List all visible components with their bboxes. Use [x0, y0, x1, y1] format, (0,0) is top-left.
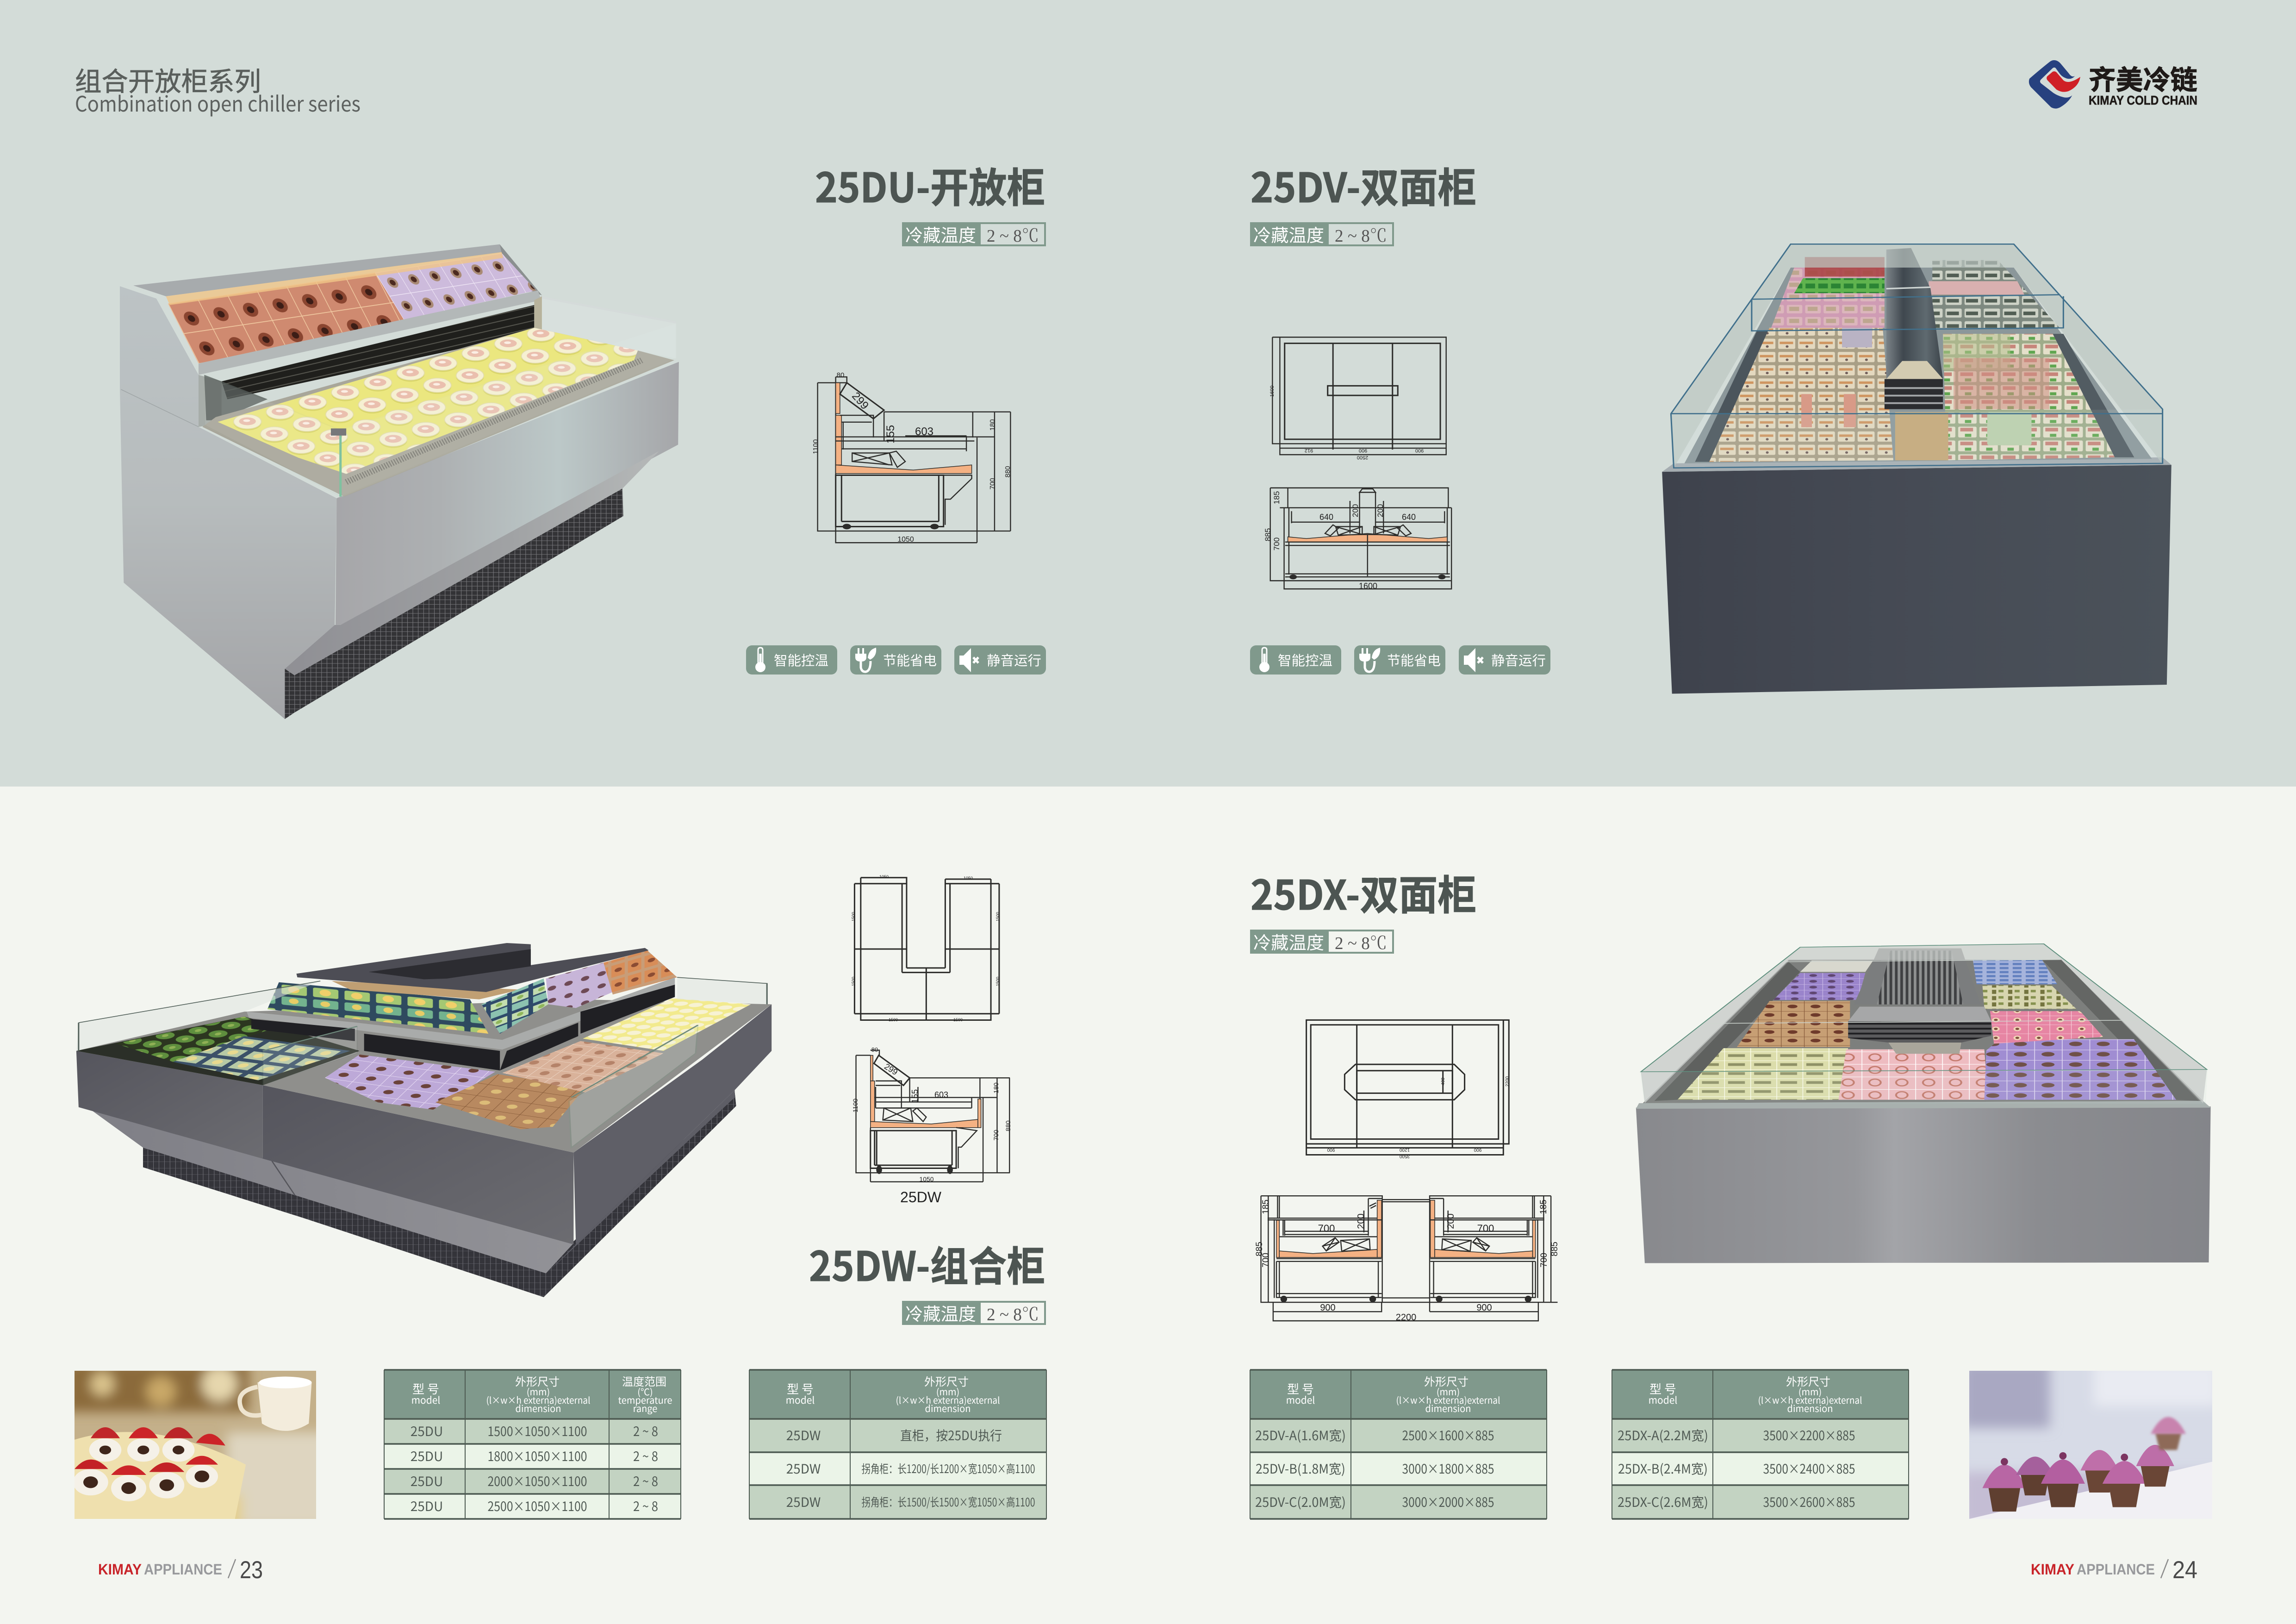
table: 25DW specifications: 拐角柜：长1500/长1500×宽1050×高1100 — [862, 1493, 1035, 1510]
table: 25DU specifications: 1500×1050×1100 — [488, 1422, 587, 1440]
table header: model — [1649, 1393, 1677, 1407]
technical drawing: 25DW plan and section: 1500 — [851, 912, 856, 921]
badge: energy saving: 节能省电 — [1387, 650, 1441, 669]
upper shelf: green boxes — [268, 982, 488, 1034]
glass top and panes — [1641, 947, 1800, 1103]
table: 25DX specifications: 3500×2400×885 — [1763, 1459, 1855, 1478]
food bed base — [202, 328, 674, 497]
heading: 25DW combination cabinet: 25DW-组合柜 — [809, 1234, 1045, 1293]
technical drawing: 25DW plan and section: 603 — [934, 1090, 948, 1099]
grille backing — [143, 1093, 736, 1297]
upper shelf: right run — [481, 979, 548, 1034]
steel rim — [1636, 1101, 2211, 1109]
product photo: 25DX double-sided cabinet — [1636, 944, 2211, 1263]
steel base — [1636, 1106, 2211, 1263]
technical drawing: 25DW plan and section: 700 — [992, 1130, 1000, 1141]
technical drawing: 25DW plan and section — [851, 874, 1012, 1206]
technical drawing: 25DU side section: 1100 — [812, 439, 820, 454]
technical drawing: 25DX plan and section: 900 — [1476, 1303, 1492, 1313]
technical drawing: 25DV plan and section: 900 — [1415, 448, 1424, 453]
footer: page 24: 24 — [2172, 1556, 2197, 1584]
technical drawing: 25DX plan and section: 885 — [1255, 1242, 1264, 1256]
table header: 温度范围 — [622, 1373, 666, 1389]
table: 25DX specifications: 25DX-C(2.6M宽) — [1618, 1493, 1708, 1511]
technical drawing: 25DX plan and section: 185 — [1261, 1199, 1271, 1214]
table header: (mm) — [527, 1385, 550, 1398]
table header: 外形尺寸 — [1424, 1373, 1468, 1389]
model label: 25DW — [900, 1189, 942, 1206]
display bed — [1684, 268, 2152, 463]
photo: cream cake with strawberries — [66, 1362, 329, 1529]
technical drawing: 25DV plan and section: 640 — [1319, 512, 1333, 522]
technical drawing: 25DX plan and section: 1200 — [1399, 1147, 1410, 1152]
table: 25DU specifications: 25DU — [411, 1422, 443, 1440]
technical drawing: 25DW plan and section: 180 — [992, 1082, 1000, 1093]
footer: page 23: APPLIANCE — [144, 1561, 222, 1578]
front panels — [76, 1051, 263, 1159]
food blocks: right column — [1985, 1039, 2176, 1100]
technical drawing: 25DX plan and section: 2200 — [1396, 1312, 1416, 1323]
heading: 25DU open cabinet: 25DU-开放柜 — [815, 156, 1045, 214]
footer: page 24 — [2031, 1556, 2197, 1584]
center tower — [1886, 248, 1943, 379]
lit shelf: orange boxes — [168, 273, 404, 363]
badge: silent operation — [954, 645, 1046, 675]
technical drawing: 25DW plan and section: 1500 — [996, 912, 1000, 921]
technical drawing: 25DW plan and section: 80 — [871, 1046, 878, 1053]
lower bed: yellow cups — [583, 998, 751, 1051]
dark base — [1662, 465, 2172, 694]
glass enclosure — [1671, 244, 1791, 468]
table: 25DU specifications: 1800×1050×1100 — [488, 1447, 587, 1465]
display bed base — [76, 999, 772, 1153]
photo: pink cupcakes — [1962, 1362, 2220, 1526]
table: 25DX specifications: 25DX-A(2.2M宽) — [1618, 1426, 1708, 1444]
glass clip — [331, 428, 346, 436]
icon: logo mark — [2029, 60, 2080, 108]
table header: model — [786, 1393, 815, 1407]
technical drawing: 25DU side section: 80 — [837, 371, 844, 379]
table: 25DV specifications: 3000×2000×885 — [1402, 1493, 1494, 1511]
U-shaped canopy — [296, 943, 649, 992]
lower slant panel — [285, 451, 659, 675]
temperature badge: 25DU — [902, 221, 1045, 247]
table header: 外形尺寸 — [515, 1373, 560, 1389]
table header: 型 号 — [787, 1380, 814, 1397]
technical drawing: 25DX plan and section: 700 — [1318, 1223, 1335, 1234]
technical drawing: 25DU side section: 603 — [915, 425, 933, 438]
technical drawing: 25DX plan and section: 200 — [1446, 1213, 1456, 1229]
technical drawing: 25DX plan and section: 900 — [1320, 1303, 1336, 1313]
technical drawing: 25DX plan and section: 900 — [1327, 1147, 1335, 1152]
technical drawing: 25DV plan and section: 900 — [1359, 448, 1367, 453]
technical drawing: 25DW plan and section: 1050 — [879, 874, 889, 879]
glass panes — [569, 1025, 698, 1148]
product photo: 25DW combination cabinet — [76, 943, 772, 1297]
table header — [411, 1373, 672, 1415]
cake and rolls — [66, 1432, 246, 1524]
black air curtains — [364, 1034, 500, 1070]
temperature badge: 25DV: 冷藏温度 — [1253, 221, 1324, 247]
table: 25DU specifications: 25DU — [411, 1447, 443, 1465]
temperature badge: 25DW: 2 ~ 8℃ — [987, 1305, 1039, 1324]
table header: 型 号 — [1287, 1380, 1314, 1397]
technical drawing: 25DX plan and section: 3500 — [1399, 1154, 1410, 1159]
technical drawing: 25DX plan and section: 700 — [1539, 1253, 1549, 1268]
technical drawing: 25DX plan and section: 885 — [1550, 1242, 1560, 1256]
temperature badge: 25DX: 冷藏温度 — [1253, 929, 1324, 954]
footer: page 24: KIMAY — [2031, 1561, 2074, 1578]
table: 25DU specifications: 2 ~ 8 — [633, 1447, 658, 1465]
temperature badge: 25DW: 冷藏温度 — [905, 1300, 976, 1325]
footer: page 24: APPLIANCE — [2077, 1561, 2155, 1578]
tower louvres — [1885, 379, 1943, 409]
badge: silent operation: 静音运行 — [987, 650, 1041, 669]
product photo: 25DU open chiller — [120, 244, 679, 719]
table header: range — [633, 1401, 657, 1415]
lower bed: green produce — [115, 1017, 272, 1062]
table: 25DV specifications: 25DV-A(1.6M宽) — [1255, 1426, 1346, 1444]
table header: dimension — [925, 1401, 971, 1415]
center tower — [1854, 948, 1980, 1005]
food blocks: center pink — [1839, 1049, 1988, 1100]
technical drawing: 25DU side section — [812, 371, 1012, 543]
food: front left — [1709, 328, 1893, 462]
table: 25DW specifications: 拐角柜：长1200/长1200×宽1050×高1100 — [862, 1460, 1035, 1477]
technical drawing: 25DU side section: 155 — [884, 425, 897, 443]
table header: model — [1286, 1393, 1315, 1407]
technical drawing: 25DV plan and section: 912 — [1305, 448, 1313, 453]
temperature badge: 25DV — [1250, 221, 1393, 247]
lower bed: tan boxes — [502, 1041, 663, 1093]
technical drawing: 25DX plan and section: 200 — [1356, 1213, 1366, 1229]
footer: page 23 — [98, 1556, 263, 1584]
lower bed: purple boxes — [325, 1055, 495, 1110]
table header: 外形尺寸 — [1786, 1373, 1830, 1389]
temperature badge: 25DW — [902, 1300, 1045, 1325]
cabinet left side — [120, 286, 336, 719]
table header: (mm) — [1437, 1385, 1460, 1398]
table header: temperature — [618, 1393, 672, 1406]
temperature badge: 25DV: 2 ~ 8℃ — [1335, 226, 1387, 246]
logo: Kimay Cold Chain: KIMAY COLD CHAIN — [2089, 93, 2197, 107]
table: 25DX specifications: 3500×2600×885 — [1763, 1493, 1855, 1511]
table: 25DV specifications: 3000×1800×885 — [1402, 1459, 1494, 1478]
technical drawing: 25DV plan and section — [1263, 337, 1451, 591]
badge: silent operation: 静音运行 — [1491, 650, 1546, 669]
page heading: Combination open chiller series — [75, 87, 361, 118]
badge: smart temperature control — [1250, 645, 1341, 675]
table header: dimension — [516, 1401, 561, 1415]
technical drawing: 25DU side section: 1050 — [897, 536, 914, 543]
table: 25DV specifications: 25DV-C(2.0M宽) — [1255, 1493, 1346, 1511]
footer: page 23: KIMAY — [98, 1561, 142, 1578]
technical drawing: 25DW plan and section: 880 — [1004, 1120, 1012, 1131]
table header — [1286, 1373, 1500, 1415]
logo: Kimay Cold Chain — [2029, 58, 2197, 108]
technical drawing: 25DX plan and section: 185 — [1539, 1199, 1549, 1214]
lit shelf: purple boxes — [375, 253, 536, 319]
display bed — [1643, 960, 2203, 1103]
technical drawing: 25DV plan and section: 185 — [1272, 491, 1281, 504]
table header: (mm) — [1798, 1385, 1822, 1398]
technical drawing: 25DX plan and section: 700 — [1261, 1253, 1271, 1268]
lower bed: brown boxes — [436, 1074, 585, 1129]
technical drawing: 25DV plan and section: 200 — [1351, 504, 1360, 517]
product photo: 25DV double-sided cabinet — [1662, 244, 2172, 694]
temperature badge: 25DX — [1250, 929, 1393, 954]
heading: 25DV double-sided cabinet: 25DV-双面柜 — [1251, 156, 1476, 214]
badge: energy saving: 节能省电 — [883, 650, 937, 669]
table: 25DU specifications: 25DU — [411, 1472, 443, 1490]
table header: dimension — [1425, 1401, 1471, 1415]
table: 25DU specifications: 25DU — [411, 1497, 443, 1515]
technical drawing: 25DV plan and section: 2500 — [1357, 455, 1368, 460]
page heading — [75, 61, 361, 118]
badge: energy saving — [1354, 645, 1445, 675]
table: 25DX specifications: 3500×2200×885 — [1763, 1426, 1855, 1444]
table: 25DX specifications: 25DX-B(2.4M宽) — [1618, 1459, 1708, 1478]
temperature badge: 25DU: 2 ~ 8℃ — [987, 226, 1039, 246]
badge: silent operation — [1459, 645, 1550, 675]
technical drawing: 25DU side section: 880 — [1004, 466, 1012, 478]
temperature badge: 25DX: 2 ~ 8℃ — [1335, 934, 1387, 953]
background: upper panel — [0, 0, 2296, 787]
technical drawing: 25DV plan and section: 1600 — [1359, 581, 1377, 591]
table: 25DW specifications — [749, 1370, 1046, 1519]
food bed: yellow cups — [218, 328, 638, 474]
slanted lower panels — [93, 1111, 573, 1274]
technical drawing: 25DV plan and section: 700 — [1272, 537, 1281, 550]
table: 25DW specifications: 25DW — [786, 1459, 821, 1478]
table header: model — [411, 1393, 440, 1407]
heading: 25DX double-sided cabinet: 25DX-双面柜 — [1251, 863, 1476, 922]
ventilation grille — [285, 488, 623, 719]
table header: (l×w×h externa)external — [1396, 1393, 1500, 1406]
feature badges: 25DU — [746, 645, 1046, 675]
technical drawing: 25DW plan and section: 1050 — [919, 1175, 934, 1183]
technical drawing: 25DX plan and section — [1255, 1020, 1560, 1323]
food blocks: left column — [1677, 1048, 1848, 1100]
technical drawing: 25DU side section: 299 — [849, 390, 871, 412]
table header: 型 号 — [1649, 1380, 1676, 1397]
food: front right — [1943, 334, 2115, 460]
table: 25DU specifications — [384, 1370, 681, 1519]
table header: 外形尺寸 — [924, 1373, 969, 1389]
table: 25DV specifications: 25DV-B(1.8M宽) — [1256, 1459, 1345, 1478]
technical drawing: 25DX plan and section: 400 — [1441, 1077, 1446, 1085]
table header: (l×w×h externa)external — [1758, 1393, 1862, 1406]
table header — [786, 1373, 1000, 1415]
table header: dimension — [1787, 1401, 1833, 1415]
table: 25DU specifications: 2 ~ 8 — [633, 1422, 658, 1440]
technical drawing: 25DU side section: 700 — [989, 478, 996, 490]
table: 25DU specifications: 2 ~ 8 — [633, 1472, 658, 1490]
technical drawing: 25DU side section: 180 — [989, 419, 996, 431]
white plate — [1969, 1462, 2212, 1519]
temperature badge: 25DU: 冷藏温度 — [905, 221, 976, 247]
technical drawing: 25DW plan and section: 155 — [910, 1089, 920, 1103]
footer: page 23: 23 — [240, 1556, 263, 1584]
table header: (l×w×h externa)external — [486, 1393, 591, 1406]
badge: smart temperature control: 智能控温 — [774, 650, 828, 669]
technical drawing: 25DW plan and section: 1100 — [852, 1099, 859, 1112]
food: back right — [1932, 260, 2060, 328]
table header: (℃) — [637, 1385, 653, 1398]
technical drawing: 25DV plan and section: 1600 — [1269, 386, 1275, 397]
technical drawing: 25DW plan and section: 1500 — [889, 1018, 898, 1022]
table: 25DW specifications: 直柜，按25DU执行 — [900, 1426, 1002, 1444]
brown cake block — [1895, 412, 1948, 460]
technical drawing: 25DX plan and section: 900 — [1474, 1147, 1481, 1152]
feature badges: 25DV — [1250, 645, 1550, 675]
technical drawing: 25DX plan and section: 2200 — [1505, 1076, 1510, 1087]
table header: 型 号 — [412, 1380, 439, 1397]
black air curtain — [222, 305, 534, 399]
top canopy — [133, 244, 504, 296]
table: 25DV specifications — [1250, 1370, 1547, 1519]
badge: smart temperature control — [746, 645, 837, 675]
technical drawing: 25DV plan and section: 885 — [1263, 528, 1272, 541]
steel ledge — [199, 290, 541, 375]
table: 25DU specifications: 2000×1050×1100 — [488, 1472, 587, 1490]
background: lower panel — [0, 787, 2296, 1624]
glass panes — [341, 323, 676, 497]
table: 25DX specifications — [1612, 1370, 1909, 1519]
technical drawing: 25DV plan and section: 200 — [1376, 504, 1385, 517]
technical drawing: 25DX plan and section: 700 — [1477, 1223, 1494, 1234]
logo: Kimay Cold Chain: 齐美冷链 — [2089, 58, 2197, 97]
page heading: 组合开放柜系列 — [75, 61, 261, 99]
cabinet front panel — [336, 362, 679, 625]
steel ledge — [247, 977, 675, 1049]
technical drawing: 25DW plan and section: 299 — [883, 1062, 899, 1077]
table header — [1649, 1373, 1862, 1415]
table: 25DV specifications: 2500×1600×885 — [1402, 1426, 1494, 1444]
table: 25DW specifications: 25DW — [786, 1426, 821, 1444]
badge: energy saving — [850, 645, 941, 675]
table: 25DW specifications: 25DW — [786, 1493, 821, 1511]
coffee cup — [257, 1377, 312, 1431]
technical drawing: 25DW plan and section: 1050 — [964, 876, 973, 881]
left and centre grilles — [143, 1148, 302, 1218]
technical drawing: 25DW plan and section: 1500 — [996, 977, 1000, 986]
table: 25DU specifications: 2500×1050×1100 — [488, 1497, 587, 1515]
technical drawing: 25DW plan and section: 1500 — [851, 977, 856, 986]
table header: (l×w×h externa)external — [896, 1393, 1000, 1406]
steel rim — [1662, 457, 2172, 472]
table header: (mm) — [936, 1385, 959, 1398]
cupcakes — [1982, 1417, 2186, 1512]
food: back left — [1771, 268, 1885, 328]
technical drawing: 25DW plan and section: 1500 — [953, 1018, 963, 1022]
technical drawing: 25DV plan and section: 640 — [1402, 512, 1416, 522]
mesh rail — [346, 360, 641, 482]
table: 25DU specifications: 2 ~ 8 — [633, 1497, 658, 1515]
badge: smart temperature control: 智能控温 — [1278, 650, 1332, 669]
